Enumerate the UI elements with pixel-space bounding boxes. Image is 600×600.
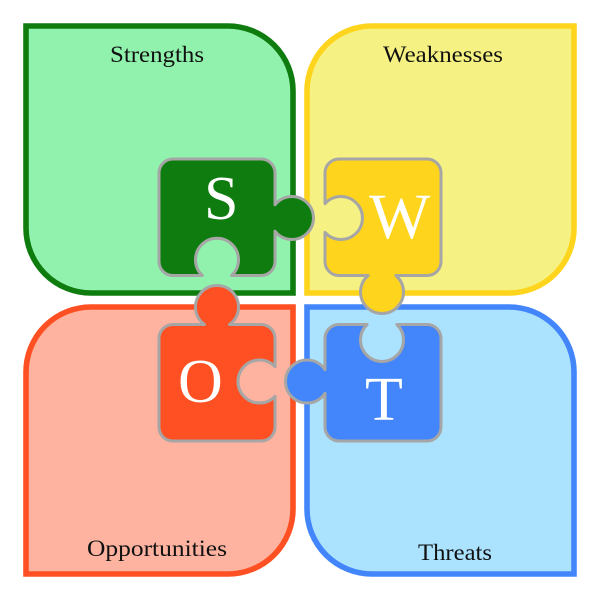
heading: threats: Threats	[418, 540, 492, 565]
letter O: O	[178, 348, 223, 416]
heading: strengths: Strengths	[110, 42, 204, 67]
letter W: W	[369, 181, 431, 253]
letter T: T	[365, 366, 403, 434]
puzzle piece: O	[159, 286, 275, 441]
panel: strengths	[26, 26, 293, 293]
heading: weaknesses: Weaknesses	[383, 42, 503, 67]
panel: weaknesses	[307, 26, 574, 293]
puzzle piece: T	[286, 324, 441, 441]
puzzle piece: W	[325, 159, 441, 313]
panel: opportunities	[26, 307, 293, 574]
panel: threats	[307, 307, 574, 574]
puzzle piece: S	[159, 159, 313, 276]
heading: opportunities: Opportunities	[87, 536, 227, 561]
letter S: S	[204, 165, 238, 233]
